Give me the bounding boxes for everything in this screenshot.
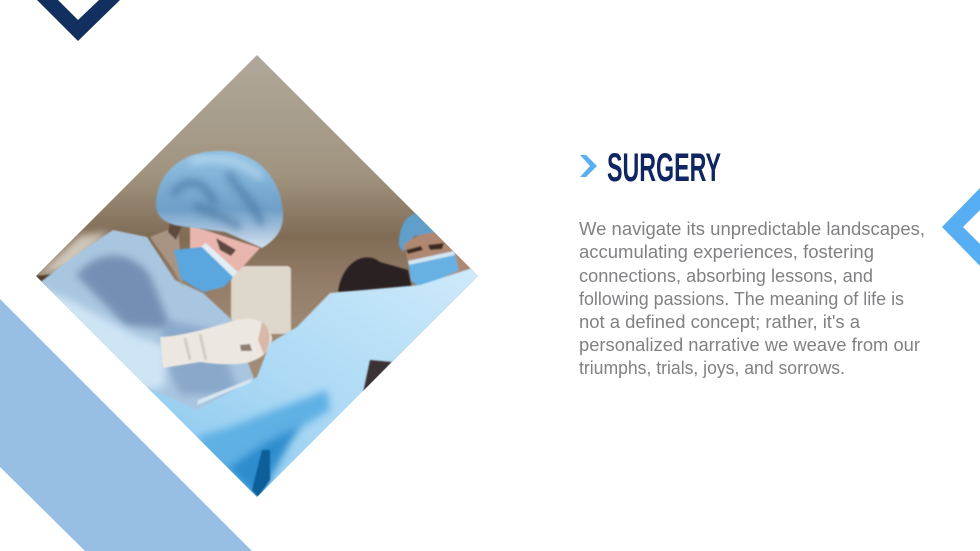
icon: right blue chevron	[942, 188, 980, 266]
body paragraph: following passions. The meaning of life is	[579, 289, 904, 309]
icon: top navy chevron	[37, 0, 120, 41]
body paragraph: not a defined concept; rather, it's a	[579, 312, 861, 332]
photo: surgeons in diamond frame	[30, 50, 490, 497]
arrow bullet	[580, 155, 597, 177]
body paragraph: accumulating experiences, fostering	[579, 242, 874, 262]
main surgeon surgical cap	[156, 151, 283, 248]
main surgeon mask	[174, 243, 238, 292]
rear surgeon	[399, 213, 470, 290]
rear surgeon cap	[398, 212, 435, 252]
surgical drape	[147, 266, 490, 497]
decorative diagonal band	[0, 299, 252, 551]
main surgeon gown	[40, 229, 254, 410]
body paragraph	[579, 219, 925, 378]
body paragraph: We navigate its unpredictable landscapes,	[579, 219, 925, 239]
photo background: room wall	[30, 50, 485, 390]
rear surgeon mask	[408, 254, 460, 286]
body paragraph: triumphs, trials, joys, and sorrows.	[579, 358, 845, 378]
main surgeon neck and face	[150, 222, 260, 287]
body paragraph: personalized narrative we weave from our	[579, 335, 920, 355]
room details: light wall, cabinet, dark hair	[36, 232, 412, 334]
gloved hand	[160, 319, 272, 368]
body paragraph: connections, absorbing lessons, and	[579, 266, 873, 286]
heading: SURGERY	[607, 146, 721, 190]
rear surgeon face	[403, 232, 470, 276]
